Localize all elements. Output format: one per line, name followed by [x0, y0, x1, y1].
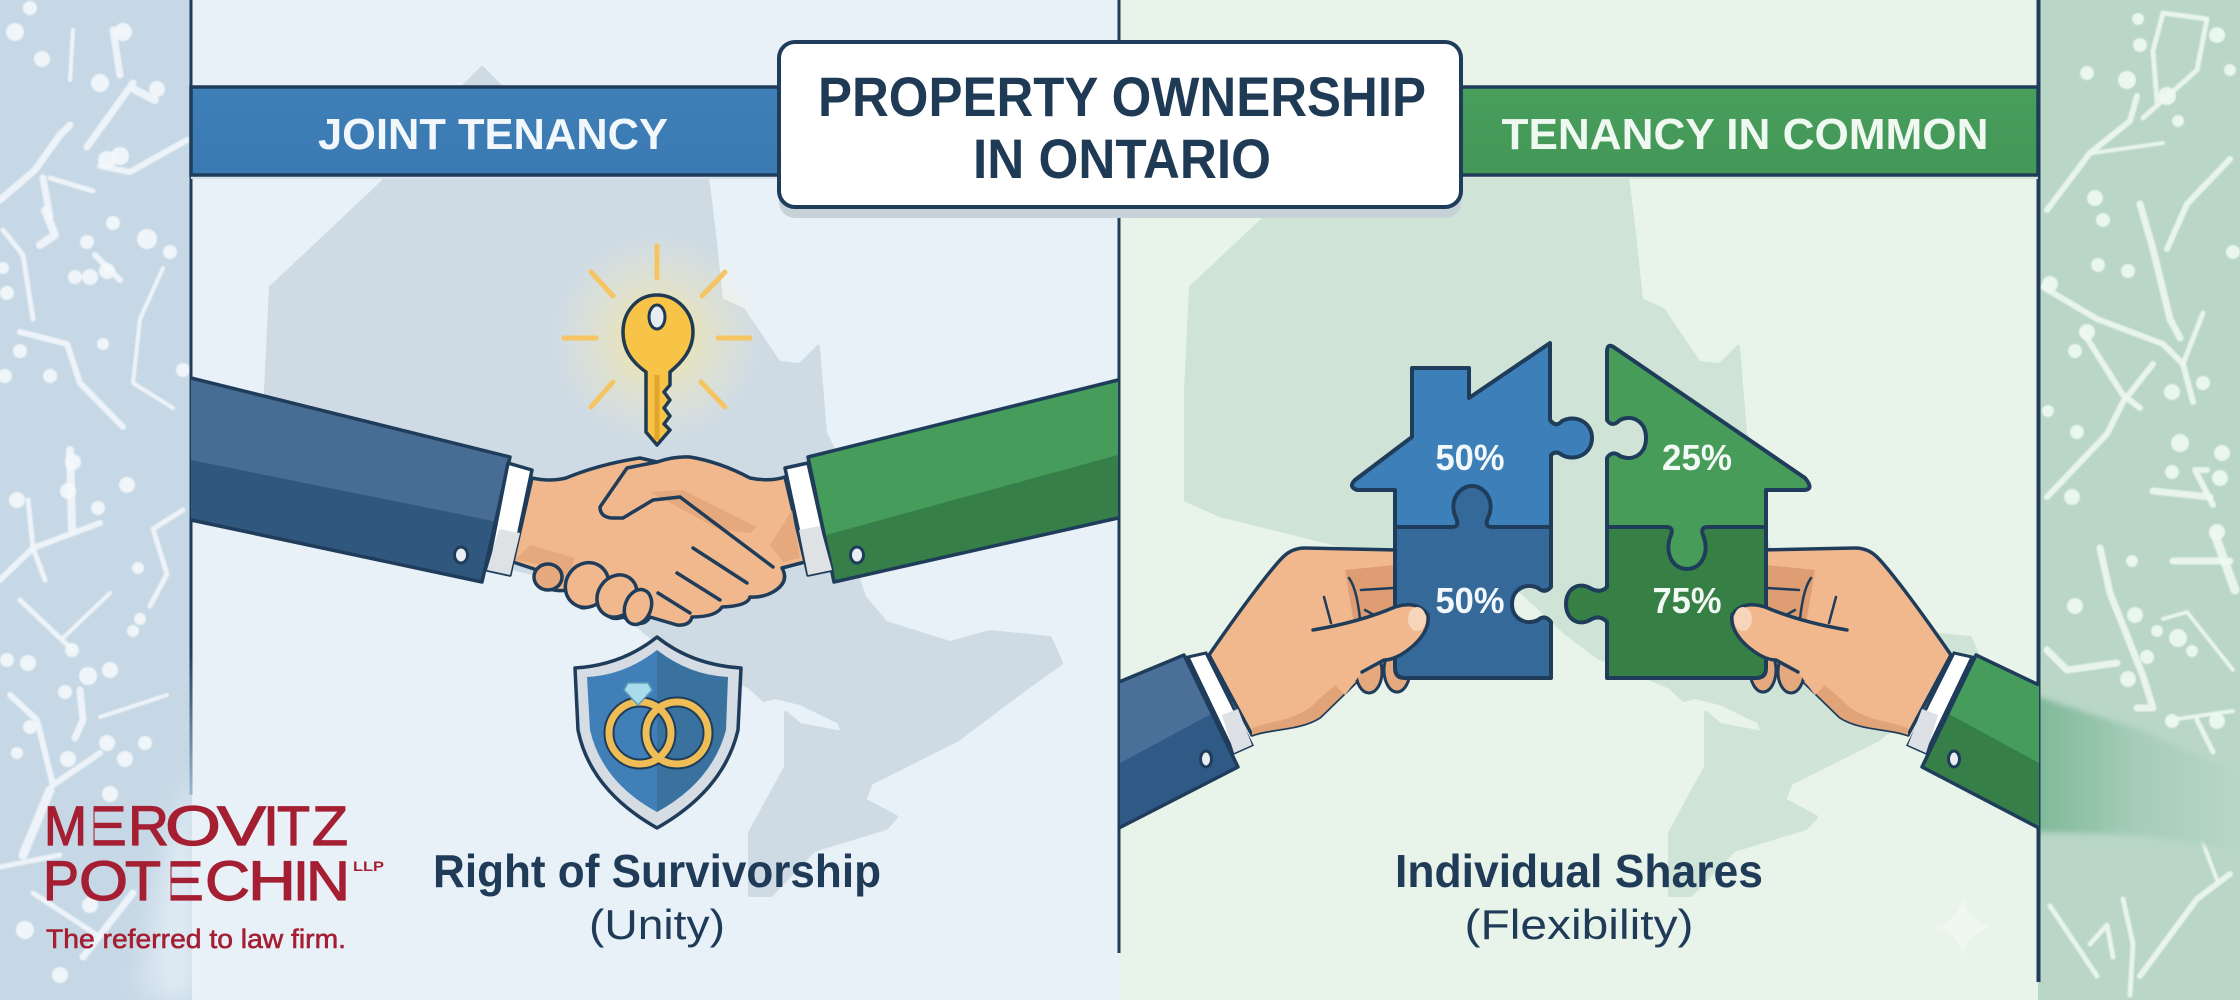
logo: Merovitz Potechin: O	[79, 849, 128, 912]
logo: Merovitz Potechin: The referred to law firm.	[46, 924, 346, 954]
logo: Merovitz Potechin: H	[248, 849, 296, 912]
logo: Merovitz Potechin: I	[263, 794, 279, 857]
handshake	[191, 378, 1118, 628]
logo: Merovitz Potechin: O	[165, 794, 221, 857]
text: right of survivorship	[433, 845, 881, 948]
left hand and blue sleeve (puzzle)	[1119, 548, 1410, 828]
header: joint tenancy band	[191, 87, 781, 179]
header: tenancy in common band: TENANCY IN COMMON	[1502, 110, 1988, 159]
logo: Merovitz Potechin: R	[128, 794, 169, 857]
logo: Merovitz Potechin: M	[44, 794, 87, 857]
right thumb on puzzle	[1732, 605, 1847, 695]
blue roof piece	[1352, 343, 1592, 535]
logo: Merovitz Potechin: N	[306, 849, 350, 912]
logo: Merovitz Potechin	[46, 805, 384, 948]
text: individual shares: (Flexibility)	[1464, 901, 1694, 948]
green roof piece	[1607, 346, 1810, 535]
green tab fill	[1668, 527, 1706, 571]
text: individual shares	[1395, 845, 1763, 948]
cuffs	[487, 463, 832, 575]
green base piece	[1566, 527, 1766, 678]
header: joint tenancy band: JOINT TENANCY	[318, 110, 668, 159]
title box: IN ONTARIO	[973, 127, 1271, 190]
logo: Merovitz Potechin: P	[43, 849, 79, 912]
logo: Merovitz Potechin: LLP	[353, 858, 384, 874]
right hand and green sleeve (puzzle)	[1750, 548, 2039, 828]
green sleeve	[808, 380, 1118, 582]
blue base piece	[1395, 486, 1551, 678]
logo: Merovitz Potechin: E	[159, 849, 204, 912]
panel: joint tenancy background	[192, 0, 1120, 1000]
blue sleeve	[191, 378, 510, 582]
logo: Merovitz Potechin: E	[82, 794, 127, 857]
panel: tenancy in common background	[1120, 0, 2038, 1000]
logo: Merovitz Potechin: C	[205, 849, 250, 912]
map: Ontario silhouette right	[1186, 68, 1981, 895]
puzzle house: green half	[1566, 346, 1810, 678]
icon: glowing key	[552, 233, 762, 445]
logo: Merovitz Potechin: I	[293, 849, 309, 912]
title box	[779, 42, 1461, 218]
logo: Merovitz Potechin: Z	[312, 794, 348, 857]
text: right of survivorship: Right of Survivorship	[433, 845, 881, 897]
title box: PROPERTY OWNERSHIP	[818, 65, 1426, 128]
text: right of survivorship: (Unity)	[589, 901, 725, 948]
watermark sparkle	[1934, 897, 1992, 957]
icon: shield with rings	[575, 637, 741, 828]
left decorative strip	[0, 0, 192, 1000]
header: tenancy in common band	[1458, 87, 2038, 179]
map: Ontario silhouette left	[266, 68, 1061, 895]
hands	[513, 457, 805, 628]
label 25 percent: 25%	[1662, 437, 1732, 478]
logo: Merovitz Potechin: T	[125, 849, 161, 912]
bottom-left strip fade	[125, 770, 192, 1000]
puzzle house: blue half	[1352, 343, 1592, 678]
label 75 percent: 75%	[1652, 580, 1722, 621]
text: individual shares: Individual Shares	[1395, 845, 1763, 897]
logo: Merovitz Potechin: T	[277, 794, 310, 857]
label 50 percent upper: 50%	[1436, 437, 1504, 478]
left thumb on puzzle	[1313, 605, 1428, 695]
label 50 percent lower: 50%	[1436, 580, 1504, 621]
logo: Merovitz Potechin: V	[217, 794, 267, 857]
right decorative strip	[2036, 0, 2240, 1000]
